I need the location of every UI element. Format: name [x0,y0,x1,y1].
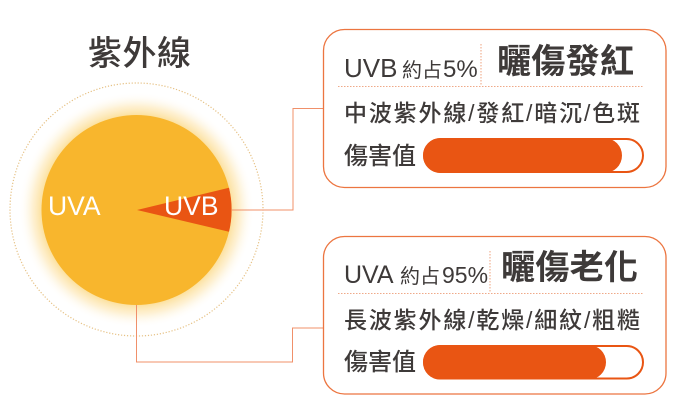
title: 紫外線 [88,35,191,73]
UVA share: UVA [344,261,394,289]
damage label: 傷害值 [344,349,416,376]
symptoms: 中波紫外線/發紅/暗沉/色斑 [344,100,640,126]
panel: UVA [324,236,666,394]
heading: 曬傷老化 [501,249,638,287]
UVA label: UVA [48,191,101,221]
panel border [324,236,666,394]
symptoms: 長波紫外線/乾燥/細紋/粗糙 [344,307,640,333]
UVA sun disc [42,115,232,305]
UVB label: UVB [164,191,218,221]
damage bar [423,345,643,380]
UVB share: UVB [344,53,397,83]
UVB wedge [137,188,232,232]
UVA share: 約占 [400,265,440,288]
damage label: 傷害值 [344,143,416,170]
dotted dividers [338,251,643,294]
dotted outer ring [10,83,263,336]
UVA share: 95% [442,262,488,288]
sun diagram [10,83,263,336]
panel border [324,30,666,188]
damage bar [423,138,643,173]
connector: UVA to panel [136,305,324,362]
UVB share: 5% [443,56,478,83]
sun glow [18,92,254,328]
dotted dividers [338,44,643,86]
connector: UVB to panel [232,108,324,210]
panel: UVB [324,30,666,188]
heading: 曬傷發紅 [497,43,634,81]
UVB share: 約占 [402,59,442,82]
